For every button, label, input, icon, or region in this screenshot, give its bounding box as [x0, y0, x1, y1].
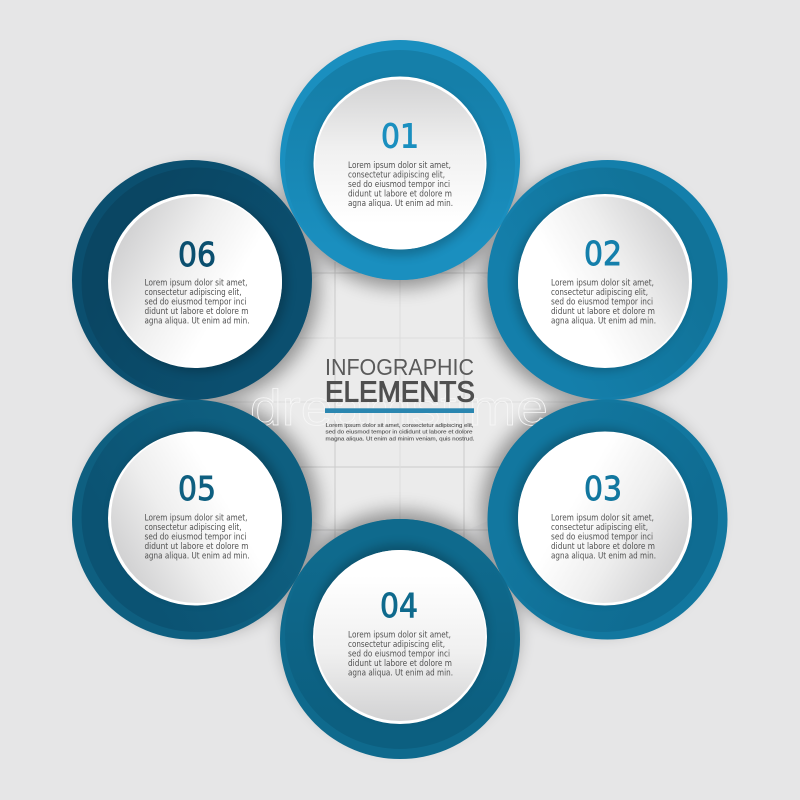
circle 03 [488, 400, 728, 640]
center description: magna aliqua. Ut enim ad minim veniam, quis nostrud. [326, 436, 475, 442]
title underline bar [325, 408, 474, 413]
text 05: agna aliqua. Ut enim ad min. [144, 552, 250, 562]
heading: infographic: INFOGRAPHIC [325, 354, 474, 380]
circle 06 [72, 160, 312, 400]
center description: Lorem ipsum dolor sit amet, consectetur adipiscing elit, [326, 423, 474, 429]
text 01: sed do eiusmod tempor inci [348, 180, 450, 190]
text 06: Lorem ipsum dolor sit amet, [144, 278, 248, 288]
center description: sed do eiusmod tempor in cididunt ut labore et dolore [326, 430, 472, 436]
text 04: consectetur adipiscing elit, [348, 640, 445, 650]
text 04 [348, 630, 453, 678]
text 01 [348, 161, 453, 209]
number 06: 06 [178, 235, 216, 274]
center description [326, 423, 475, 442]
text 03: Lorem ipsum dolor sit amet, [551, 514, 654, 524]
circle 01 [280, 40, 520, 280]
number 05: 05 [178, 469, 216, 508]
text 03: didunt ut labore et dolore m [551, 542, 655, 552]
number 04: 04 [380, 586, 418, 625]
center title [325, 354, 475, 442]
text 04: Lorem ipsum dolor sit amet, [348, 630, 451, 640]
circle 02 [488, 160, 728, 400]
circle 04 [280, 519, 520, 759]
text 04: didunt ut labore et dolore m [348, 659, 452, 669]
text 05: sed do eiusmod tempor inci [144, 532, 246, 542]
text 01: agna aliqua. Ut enim ad min. [348, 199, 453, 209]
heading: elements: ELEMENTS [325, 376, 475, 408]
watermark: dreamstime [250, 380, 548, 436]
number 02: 02 [584, 234, 622, 273]
text 06: agna aliqua. Ut enim ad min. [144, 316, 250, 326]
text 06: consectetur adipiscing elit, [144, 288, 242, 298]
text 01: didunt ut labore et dolore m [348, 190, 452, 200]
circle shadows [85, 54, 715, 745]
text 02: sed do eiusmod tempor inci [551, 298, 653, 308]
circle 05 [72, 400, 312, 640]
text 02: Lorem ipsum dolor sit amet, [551, 278, 654, 288]
number 01: 01 [381, 116, 419, 156]
text 05: consectetur adipiscing elit, [144, 523, 242, 533]
number 03: 03 [584, 469, 622, 508]
text 03: consectetur adipiscing elit, [551, 523, 648, 533]
text 02 [551, 278, 656, 326]
text 03 [551, 514, 656, 562]
text 04: agna aliqua. Ut enim ad min. [348, 668, 453, 678]
text 02: agna aliqua. Ut enim ad min. [551, 316, 656, 326]
text 02: consectetur adipiscing elit, [551, 288, 648, 298]
text 04: sed do eiusmod tempor inci [348, 650, 450, 660]
text 05: didunt ut labore et dolore m [144, 542, 248, 552]
text 05 [144, 514, 250, 562]
text 02: didunt ut labore et dolore m [551, 307, 655, 317]
text 03: sed do eiusmod tempor inci [551, 532, 653, 542]
center panel with grid [205, 240, 595, 560]
text 06: sed do eiusmod tempor inci [144, 298, 246, 308]
text 01: consectetur adipiscing elit, [348, 170, 445, 180]
text 03: agna aliqua. Ut enim ad min. [551, 552, 656, 562]
text 06: didunt ut labore et dolore m [144, 307, 248, 317]
text 01: Lorem ipsum dolor sit amet, [348, 161, 451, 171]
text 06 [144, 278, 250, 326]
text 05: Lorem ipsum dolor sit amet, [144, 514, 248, 524]
